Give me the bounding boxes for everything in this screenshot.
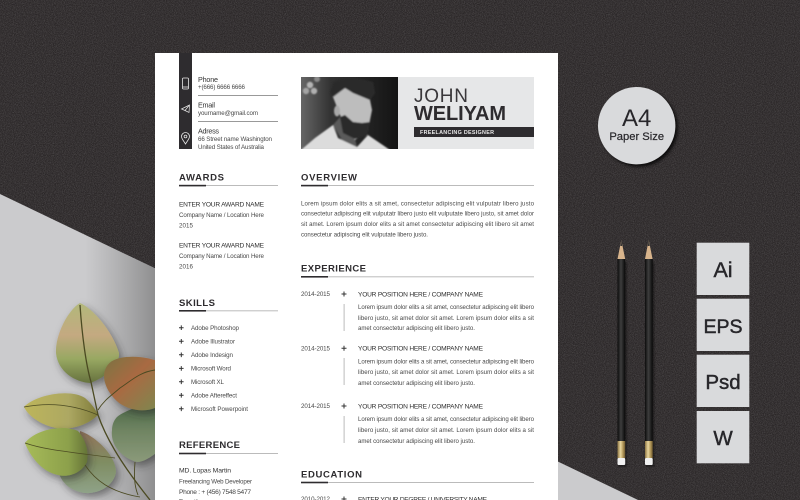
job title bar: FREELANCING DESIGNER [420,130,494,136]
format badge: Psd: Psd [705,371,741,394]
experience section: EXPERIENCE [301,264,366,274]
name banner [398,77,534,149]
experience entry 1: 2014-2015 [301,291,331,298]
name: Weliyam: WELIYAM [414,103,506,125]
reference section: Freelancing Web Developer [179,478,252,485]
overview section: Lorem ipsum dolor elits a sit amet, consectetur adipiscing elit vulputatr libero justo [301,200,535,207]
pencil 1 [618,240,627,467]
awards section: 2016 [179,264,194,270]
leaf: right orange [104,357,160,410]
profile photo [301,76,398,150]
contact: email [198,100,258,117]
reference section: MD. Lopas Martin [179,468,231,474]
botanical leaves illustration [24,303,160,500]
contact: phone [198,75,246,91]
experience entry 1: libero justo, sit amet dolor sit amet. Lorem ipsum dolor elits a sit [358,315,534,322]
resume page [155,53,558,500]
skills section: SKILLS [179,298,215,309]
awards section: AWARDS [179,172,224,184]
format badge: EPS [697,299,749,351]
contact: email: Email [198,100,215,110]
leaf: right dark [112,398,160,462]
experience entry 1: Lorem ipsum dolor elits a sit amet, consectetur adipiscing elit libero [358,304,535,311]
experience entry 2: libero justo, sit amet dolor sit amet. Lorem ipsum dolor elits a sit [358,369,534,376]
contact sidebar strip [179,53,192,149]
A4 paper size badge: Paper Size [609,131,664,143]
contact: address: 66 Street name Washington [198,136,273,143]
grey diagonal background panel [0,194,638,500]
leaf stems and veins [24,305,155,500]
A4 paper size badge [598,87,678,167]
name: John: JOHN [414,86,468,107]
overview section [301,172,535,239]
awards section: Company Name / Location Here [179,212,265,219]
format badge: W [697,411,749,463]
contact: address: Adress [198,126,219,136]
pencil 2 [645,240,654,467]
experience entry 1: YOUR POSITION HERE / COMPANY NAME [358,291,484,298]
reference section: Phone : + (456) 7548 5477 [179,489,251,496]
format badge: Ai: Ai [713,258,733,282]
experience entry 3: 2014-2015 [301,403,331,410]
format badge: Ai [697,243,749,295]
icon: paper plane [182,105,190,112]
skills section: Adobe Illustrator [191,338,235,346]
A4 paper size badge: A4 [622,105,651,132]
icon: location pin [182,132,190,144]
experience entry 1: amet consectetur adipiscing elit libero justo. [358,325,475,332]
format badge: Psd [697,355,749,407]
reference section: REFERENCE [179,440,240,451]
awards section: ENTER YOUR AWARD NAME [179,242,265,250]
education section: EDUCATION [301,469,362,480]
awards section [179,172,278,270]
awards section: ENTER YOUR AWARD NAME [179,201,265,208]
experience entry 2: 2014-2015 [301,346,331,352]
leaf: lower brown [60,431,116,493]
experience entry 2: YOUR POSITION HERE / COMPANY NAME [358,346,484,353]
experience entry 3: amet consectetur adipiscing elit libero justo. [358,438,475,445]
overview section: OVERVIEW [301,172,357,184]
awards section: 2015 [179,222,194,230]
icon: phone [182,78,188,89]
skills section: Adobe Photoshop [191,325,240,332]
overview section: sit amet. Lorem ipsum dolor elits a sit amet consectetur adipiscing elit libero sit amet [301,221,534,228]
experience entry 2 [301,346,535,387]
contact: email: yourname@gmail.com [198,110,258,117]
format badge: EPS: EPS [703,316,743,338]
leaf: middle yellow [24,393,98,429]
experience section [301,264,535,445]
overview section: consectetur adipiscing elit vulputate libero justo. [301,232,428,239]
reference section [179,440,278,500]
skills section: Microsoft XL [191,379,225,386]
experience entry 2: amet consectetur adipiscing elit libero justo. [358,380,475,387]
experience entry 3 [301,403,535,445]
experience entry 3: YOUR POSITION HERE / COMPANY NAME [358,403,484,410]
experience entry 1 [301,291,535,332]
skills section: Microsoft Word [191,366,232,373]
leaf: lower green [25,428,88,476]
contact: address [198,126,273,151]
format badge: W: W [713,427,733,450]
contact: phone: +(666) 6666 6666 [198,84,246,91]
leaf: top [56,303,119,383]
education section [301,469,534,500]
overview section: consectetur adipiscing elit vulputatr libero justo elit vulputate libero justo, sit amet dolor [301,211,534,218]
skills section [179,298,278,413]
skills section: Adobe Aftereffect [191,392,237,400]
experience entry 3: Lorem ipsum dolor elits a sit amet, consectetur adipiscing elit libero [358,416,535,423]
skills section: Adobe Indesign [191,352,234,359]
experience entry 3: libero justo, sit amet dolor sit amet. Lorem ipsum dolor elits a sit [358,427,534,434]
skills section: Microsoft Powerpoint [191,406,248,413]
contact: address: United States of Australia [198,144,265,151]
awards section: Company Name / Location Here [179,253,265,260]
contact: phone: Phone [198,75,218,84]
experience entry 2: Lorem ipsum dolor elits a sit amet, consectetur adipiscing elit libero [358,358,535,366]
